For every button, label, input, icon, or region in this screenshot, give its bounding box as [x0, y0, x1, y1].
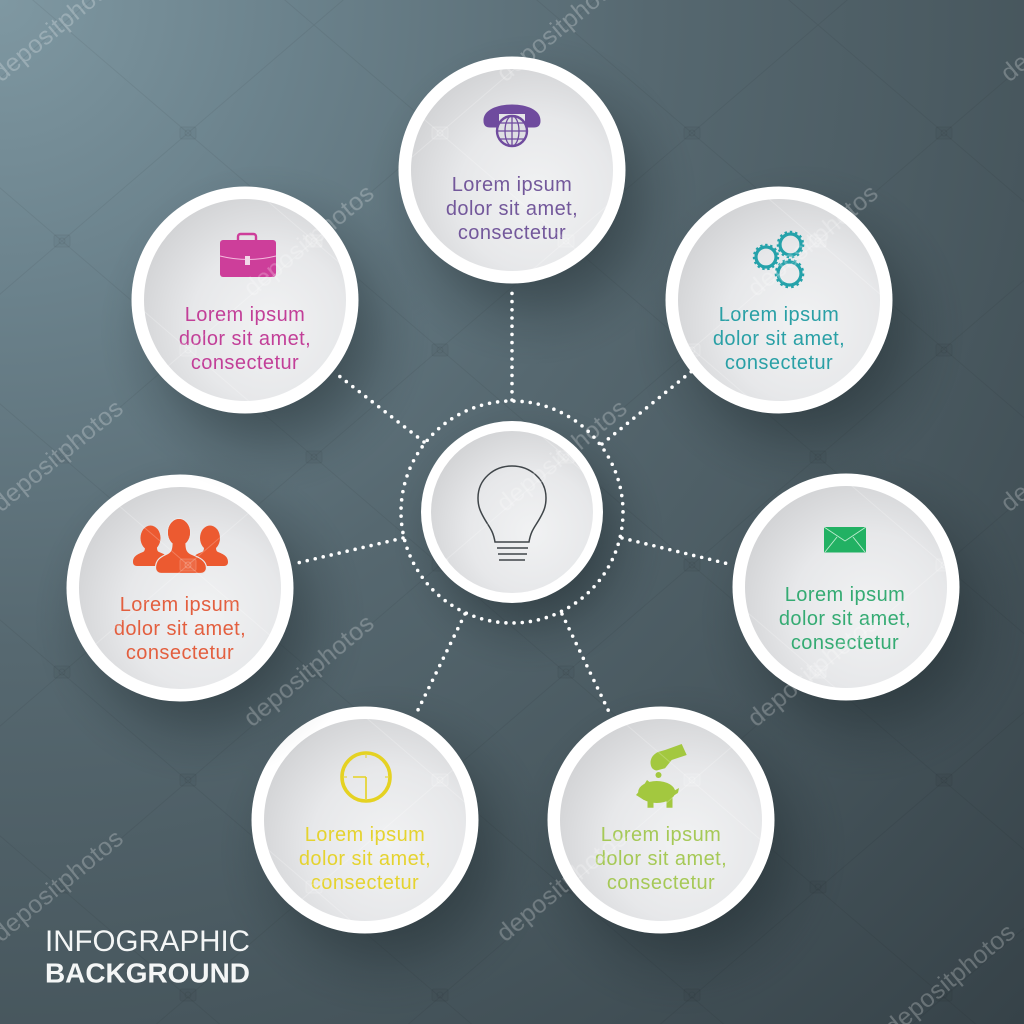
panel: center bulb	[394, 403, 664, 673]
icon: clock	[342, 753, 390, 801]
text: clock: consectetur	[311, 872, 419, 894]
icon: piggy bank	[636, 744, 687, 808]
panel: phone	[367, 35, 697, 365]
text: briefcase: dolor sit amet,	[179, 328, 311, 350]
watermarks: depositphotos	[238, 179, 380, 303]
text: gears: consectetur	[725, 352, 833, 374]
panel: briefcase	[100, 165, 430, 495]
text: envelope: Lorem ipsum	[785, 584, 905, 606]
text: briefcase: Lorem ipsum	[185, 304, 305, 326]
icon: people	[133, 518, 228, 574]
title: BACKGROUND	[45, 958, 250, 988]
watermarks: depositphotos	[742, 179, 884, 303]
text: briefcase: consectetur	[191, 352, 299, 374]
text: phone: Lorem ipsum	[452, 174, 572, 196]
panel: envelope	[701, 452, 1024, 782]
text: people: consectetur	[126, 642, 234, 664]
title	[45, 925, 250, 988]
panel: piggy bank	[516, 685, 846, 1015]
text: people: Lorem ipsum	[120, 594, 240, 616]
text: people: dolor sit amet,	[114, 618, 246, 640]
watermarks: depositphotos	[238, 609, 380, 733]
panel: gears	[634, 165, 964, 495]
text: envelope: consectetur	[791, 632, 899, 654]
text: envelope: dolor sit amet,	[779, 608, 911, 630]
text: clock: Lorem ipsum	[305, 824, 425, 846]
text: piggy bank: dolor sit amet,	[595, 848, 727, 870]
icon: light bulb	[478, 466, 546, 560]
icon: gears	[754, 232, 803, 287]
icon: briefcase	[220, 234, 276, 277]
panel: people	[35, 453, 365, 783]
title: INFOGRAPHIC	[45, 925, 250, 958]
text: clock: dolor sit amet,	[299, 848, 431, 870]
panel: clock	[220, 685, 550, 1015]
text: piggy bank: consectetur	[607, 872, 715, 894]
text: phone: dolor sit amet,	[446, 198, 578, 220]
text: piggy bank: Lorem ipsum	[601, 824, 721, 846]
icon: phone with globe	[483, 104, 541, 146]
dotted connector ring and spokes	[293, 286, 733, 716]
watermarks: depositphotos	[491, 394, 633, 518]
text: gears: dolor sit amet,	[713, 328, 845, 350]
text: gears: Lorem ipsum	[719, 304, 839, 326]
watermarks: depositphotos	[742, 609, 884, 733]
icon: envelope	[824, 527, 866, 552]
text: phone: consectetur	[458, 222, 566, 244]
watermarks: depositphotos	[491, 824, 633, 948]
